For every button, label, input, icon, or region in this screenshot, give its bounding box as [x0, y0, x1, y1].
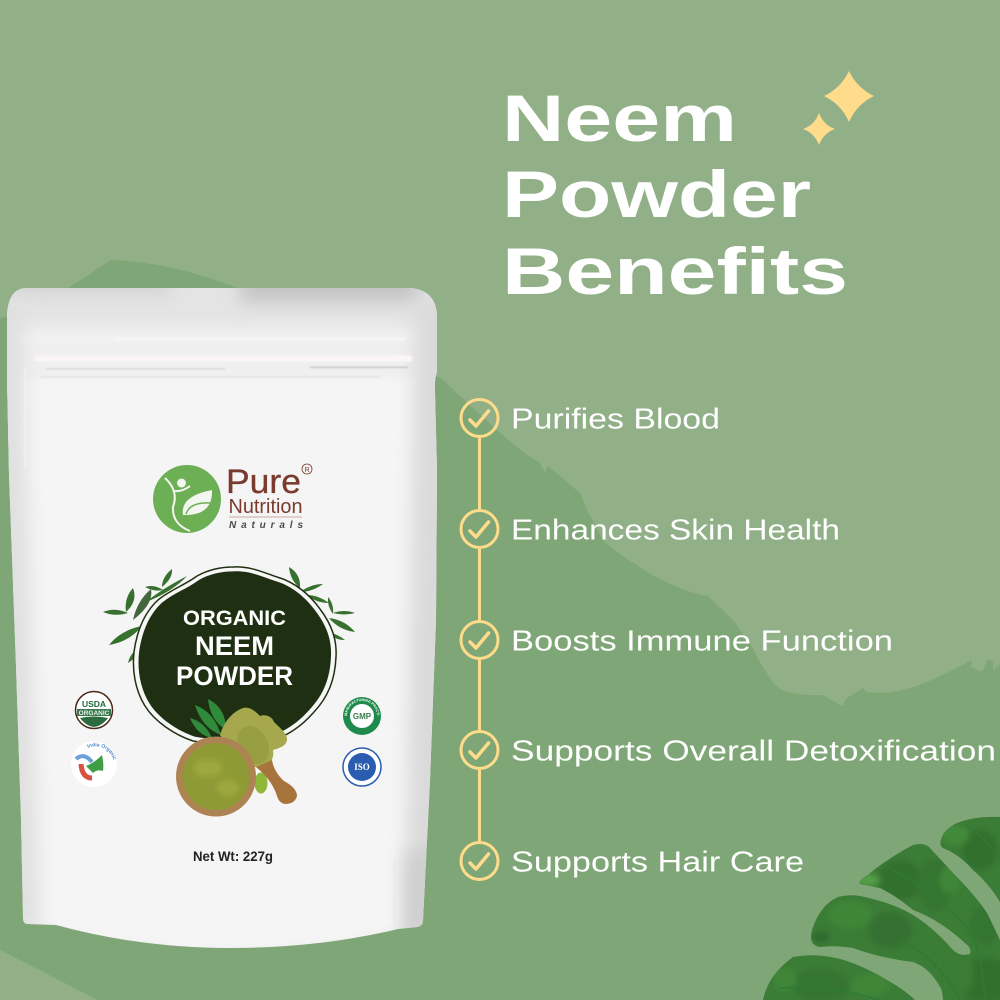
side gussets	[7, 308, 437, 929]
certification: India Organic	[71, 741, 117, 787]
label badge: dark circle with wavy ring	[133, 567, 336, 744]
title: Neem Powder Benefits: Benefits	[502, 234, 848, 308]
benefit: Supports Overall Detoxification	[461, 732, 996, 768]
certification: USDA Organic: USDA	[82, 699, 106, 709]
label text: NEEM	[195, 631, 274, 661]
small leaves	[190, 699, 226, 738]
seal lines	[36, 356, 412, 378]
logo mark	[153, 465, 221, 533]
top header shading	[7, 288, 437, 377]
benefit: Enhances Skin Health	[461, 510, 840, 548]
certification: ISO: ISO	[354, 762, 370, 772]
benefit: Purifies Blood: Purifies Blood	[511, 404, 720, 436]
benefit: Enhances Skin Health: Enhances Skin Health	[511, 514, 840, 546]
brand logo	[153, 463, 312, 533]
net weight: Net Wt: 227g	[193, 848, 273, 864]
certification: ISO	[343, 748, 381, 786]
logo wordmark: Naturals	[229, 520, 303, 531]
benefit: Supports Hair Care	[461, 842, 804, 880]
neem leaves	[103, 567, 355, 663]
wooden scoop handle	[256, 760, 297, 804]
logo wordmark: R	[304, 467, 310, 474]
logo wordmark: Nutrition	[228, 496, 302, 518]
benefit: Boosts Immune Function	[461, 622, 893, 658]
certification: GMP	[343, 697, 381, 735]
green fruit	[254, 772, 268, 794]
bottom shading	[20, 932, 430, 970]
benefit: Supports Hair Care: Supports Hair Care	[511, 846, 804, 878]
logo wordmark	[226, 463, 312, 531]
monstera leaf, bottom right	[760, 810, 1000, 1000]
certification: GMP: GMP	[353, 712, 372, 721]
benefit: Supports Overall Detoxification: Supports Overall Detoxification	[511, 736, 996, 768]
background: darker green hill shape	[0, 260, 1000, 1000]
certification: India Organic: India Organic	[87, 742, 116, 760]
benefit: Purifies Blood	[461, 400, 720, 436]
certification: USDA Organic	[76, 692, 112, 728]
title: Neem Powder Benefits: Neem	[502, 81, 737, 155]
icon: sparkles	[803, 71, 874, 145]
benefits timeline connector	[478, 438, 481, 841]
benefit: Boosts Immune Function: Boosts Immune Function	[511, 626, 893, 658]
logo wordmark: Pure	[226, 463, 301, 501]
certification: USDA Organic: ORGANIC	[79, 710, 110, 717]
powder pile	[220, 708, 287, 767]
title: Neem Powder Benefits: Powder	[502, 157, 811, 231]
wooden bowl	[176, 736, 256, 816]
label text: POWDER	[176, 661, 293, 691]
product pouch	[7, 288, 437, 948]
title: Neem Powder Benefits	[502, 81, 848, 308]
pouch body	[7, 288, 437, 948]
benefit list	[461, 400, 996, 880]
label text: ORGANIC	[183, 607, 286, 630]
certification: GMP: MANUFACTURING PRACTICES	[344, 698, 380, 716]
label text	[176, 607, 293, 691]
powder bowl and scoop illustration	[176, 699, 297, 816]
